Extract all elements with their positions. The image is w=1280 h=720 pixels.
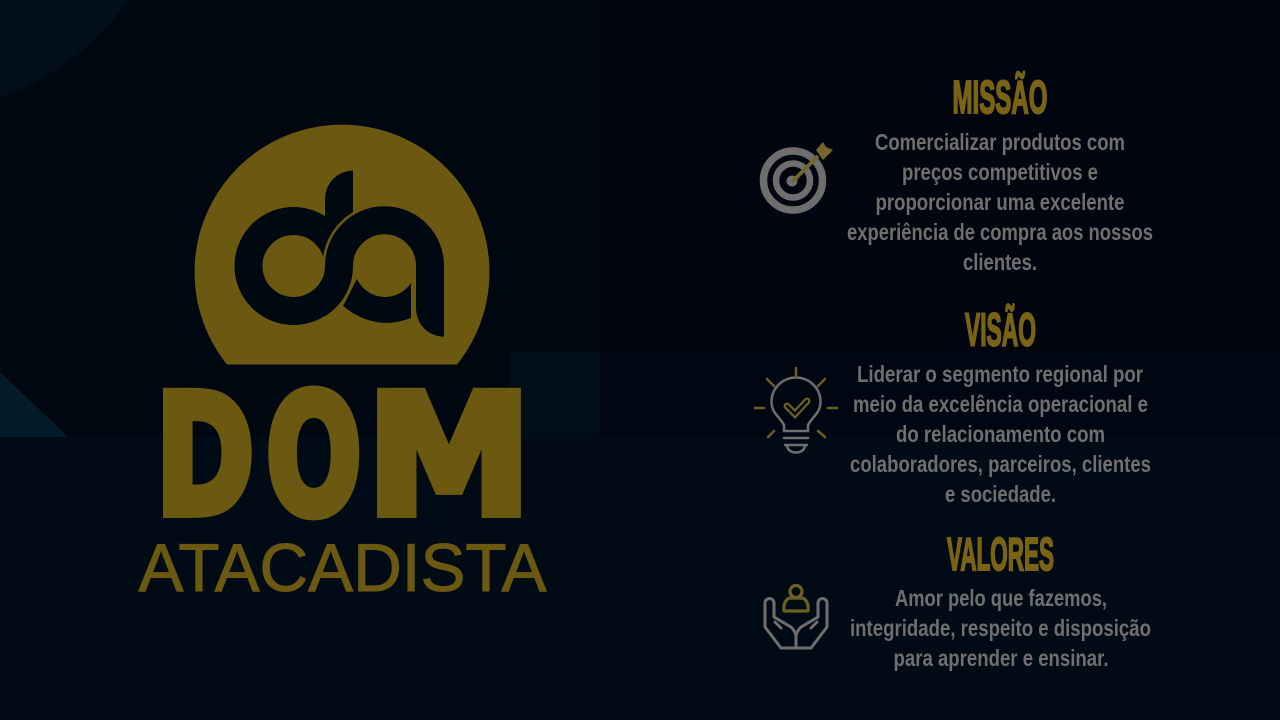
icon: hands holding person <box>765 586 827 648</box>
panel: visão: VISÃO <box>965 304 1036 356</box>
text block: valores <box>850 585 1151 671</box>
text block: visão: colaboradores, parceiros, clientes <box>850 451 1151 477</box>
panel: missão <box>764 71 1153 275</box>
text block: visão: e sociedade. <box>945 481 1056 507</box>
icon: target with arrow <box>764 142 833 210</box>
wordmark: DOM: O <box>266 361 361 553</box>
text block: missão: preços competitivos e <box>902 159 1098 185</box>
wordmark: DOM: M <box>367 360 531 552</box>
text block: valores: integridade, respeito e disposição <box>850 615 1151 641</box>
wordmark: ATACADISTA: ATACADISTA <box>138 530 547 606</box>
text block: visão <box>850 361 1151 507</box>
text block: missão: clientes. <box>963 249 1037 275</box>
heading: missão: MISSÃO <box>952 71 1048 123</box>
wordmark: DOM <box>156 360 531 553</box>
text block: visão: Liderar o segmento regional por <box>857 361 1143 387</box>
text block: missão: proporcionar uma excelente <box>876 189 1124 215</box>
panel: valores: VALORES <box>947 528 1054 580</box>
icon: light bulb with check <box>755 368 837 452</box>
panel: valores <box>765 528 1151 671</box>
text block: valores: Amor pelo que fazemos, <box>895 585 1107 611</box>
text block: missão <box>847 129 1153 275</box>
text block: visão: do relacionamento com <box>896 421 1105 447</box>
panel: visão <box>755 304 1151 507</box>
text block: valores: para aprender e ensinar. <box>894 645 1108 671</box>
logo badge: gold circle with da monogram <box>194 125 490 364</box>
text block: visão: meio da excelência operacional e <box>853 391 1148 417</box>
logo <box>138 125 547 606</box>
text block: missão: experiência de compra aos nossos <box>847 219 1153 245</box>
text block: missão: Comercializar produtos com <box>875 129 1125 155</box>
wordmark: DOM: D <box>156 360 254 552</box>
